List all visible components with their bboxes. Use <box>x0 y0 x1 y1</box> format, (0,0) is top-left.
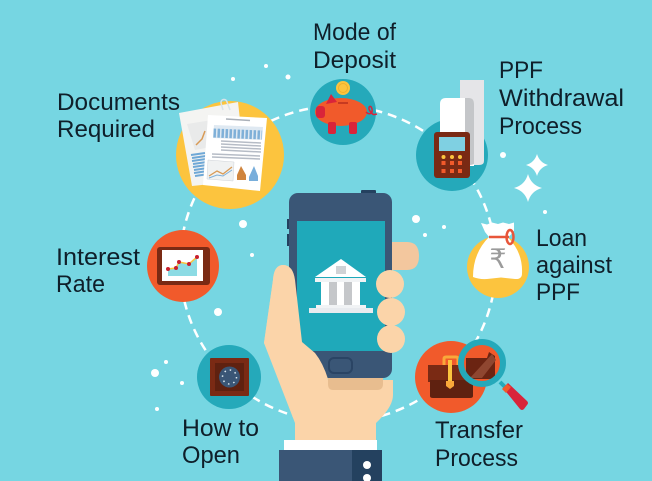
heading: Documents Required: Required <box>57 116 155 143</box>
heading: PPF Withdrawal Process: Withdrawal <box>499 85 624 112</box>
heading: PPF Withdrawal Process: PPF <box>499 57 543 84</box>
panel: transfer process <box>415 341 528 472</box>
panel: documents required <box>57 89 284 209</box>
icon: orange circle <box>147 230 219 302</box>
icon: teal circle <box>197 345 261 409</box>
heading: Documents Required: Documents <box>57 89 180 116</box>
icon: safe <box>210 358 249 396</box>
heading: Interest Rate: Interest <box>56 244 140 271</box>
heading: Transfer Process: Transfer <box>435 417 523 444</box>
heading: Transfer Process <box>435 417 523 472</box>
heading: PPF Withdrawal Process: Process <box>499 113 582 140</box>
heading: How to Open <box>182 415 259 469</box>
icon: fingertip behind phone <box>385 242 419 270</box>
icon: teal circle <box>310 79 376 145</box>
heading: Documents Required <box>57 89 180 143</box>
heading: Loan against PPF: PPF <box>536 279 580 306</box>
icon: palm shadow <box>328 378 383 390</box>
icon: sleeve <box>279 450 382 481</box>
heading: Mode of Deposit: Deposit <box>313 47 396 74</box>
icon: shirt cuff <box>284 440 377 450</box>
heading: Loan against PPF: Loan <box>536 225 587 252</box>
panel: loan against PPF <box>467 222 612 306</box>
panel: how to open <box>182 345 261 469</box>
icon: money bag <box>473 222 522 279</box>
heading: Transfer Process: Process <box>435 445 518 472</box>
panel: interest rate <box>56 230 219 302</box>
illustration: hand holding phone <box>264 190 419 481</box>
heading: Interest Rate <box>56 244 140 298</box>
icon: yellow circle <box>176 101 284 209</box>
panel: PPF withdrawal process <box>416 57 624 191</box>
icon: briefcase under magnifier <box>428 342 528 410</box>
icon: yellow circle <box>467 236 529 298</box>
heading: Mode of Deposit <box>313 19 396 74</box>
heading: PPF Withdrawal Process <box>499 57 624 140</box>
icon: piggy bank <box>315 81 377 134</box>
icon: calculator with receipt <box>434 80 484 178</box>
heading: Mode of Deposit: Mode of <box>313 19 396 46</box>
icon: hand palm <box>264 265 393 440</box>
heading: How to Open: How to <box>182 415 259 442</box>
panel: mode of deposit <box>310 19 396 145</box>
icon: documents <box>179 99 267 191</box>
heading: Interest Rate: Rate <box>56 271 105 298</box>
icon: phone <box>287 190 392 378</box>
heading: How to Open: Open <box>182 442 240 469</box>
icon: line chart monitor <box>157 247 210 285</box>
icon: bank building <box>309 259 373 313</box>
icon: thumb <box>264 265 328 423</box>
icon: sparkles <box>514 154 548 202</box>
icon: fingers <box>376 270 405 353</box>
heading: Loan against PPF <box>536 225 612 306</box>
icon: orange circle <box>415 341 487 413</box>
icon: teal circle <box>416 119 488 191</box>
icon: money bag: ₹ <box>489 244 507 275</box>
heading: Loan against PPF: against <box>536 252 612 279</box>
